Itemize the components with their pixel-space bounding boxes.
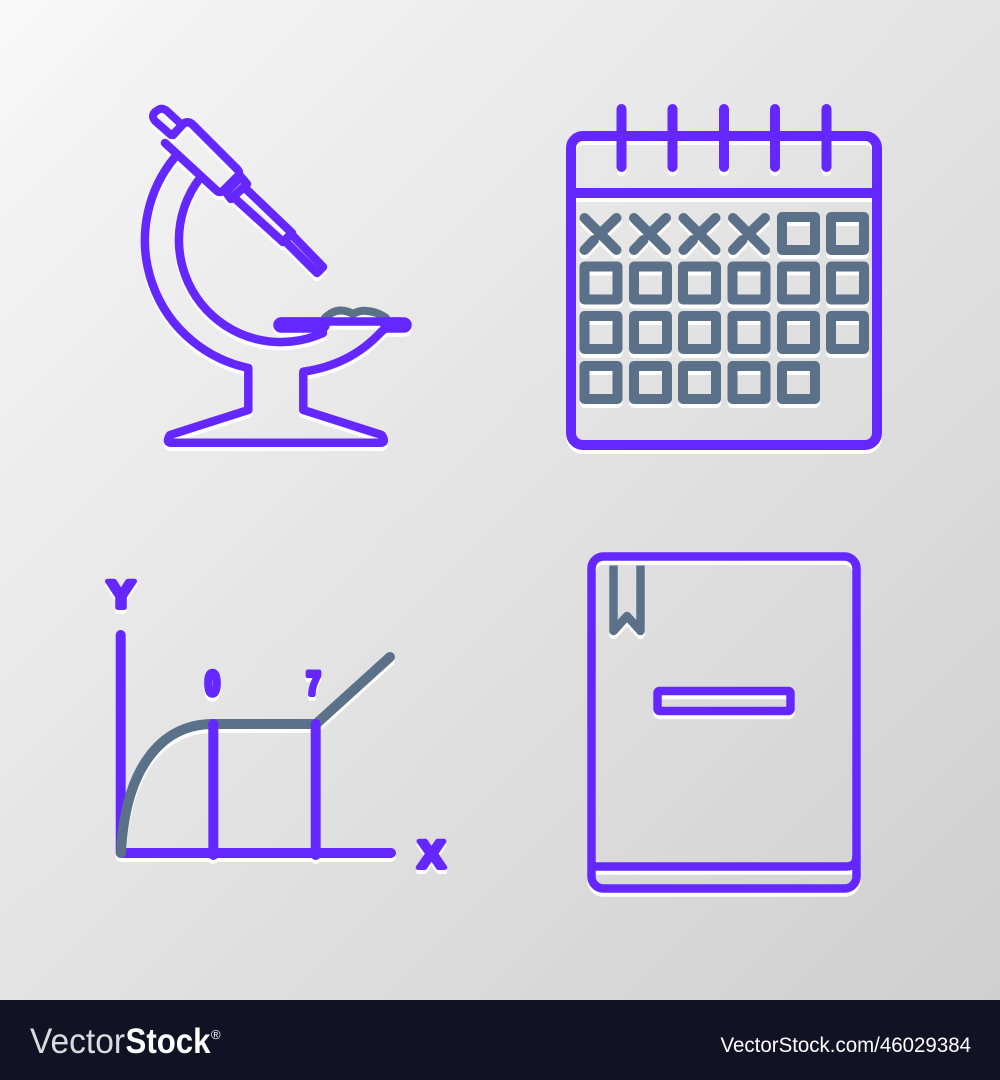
- microscope lower tube: [235, 188, 292, 242]
- icon: microscope: [145, 109, 404, 443]
- icon: graph: [107, 574, 446, 876]
- icon: book: [592, 556, 856, 888]
- calendar frame: [566, 136, 882, 445]
- icon: calendar: [566, 109, 882, 445]
- microscope stage: [281, 322, 404, 325]
- microscope collar: [226, 177, 247, 199]
- footer logo: Vector: [30, 1022, 125, 1061]
- footer image id: VectorStock.com/46029384: [720, 1034, 971, 1057]
- graph axes: [121, 635, 391, 853]
- graph vertical markers: [213, 724, 316, 855]
- microscope inner arc: [179, 178, 323, 342]
- microscope specimen: [325, 310, 386, 318]
- footer logo: ®: [211, 1027, 221, 1042]
- book cover: [592, 556, 856, 888]
- microscope arm and base: [145, 157, 392, 443]
- value label 0: 0: [206, 666, 220, 702]
- crossed-out days: [584, 218, 765, 250]
- bookmark: [614, 566, 640, 631]
- value label 7: 7: [306, 666, 320, 702]
- footer bar: [0, 1000, 1000, 1080]
- footer logo: Stock: [126, 1022, 211, 1061]
- calendar rings: [622, 109, 826, 167]
- microscope objective: [286, 235, 323, 273]
- open days grid: [584, 217, 864, 399]
- axis label Y: Y: [107, 574, 135, 616]
- axis label X: X: [418, 834, 446, 876]
- graph curve: [121, 657, 390, 853]
- book minus label: [658, 691, 790, 711]
- book spine line: [592, 856, 856, 866]
- microscope tube body: [165, 122, 239, 192]
- microscope eyepiece: [153, 109, 181, 135]
- footer logo: [30, 1022, 221, 1061]
